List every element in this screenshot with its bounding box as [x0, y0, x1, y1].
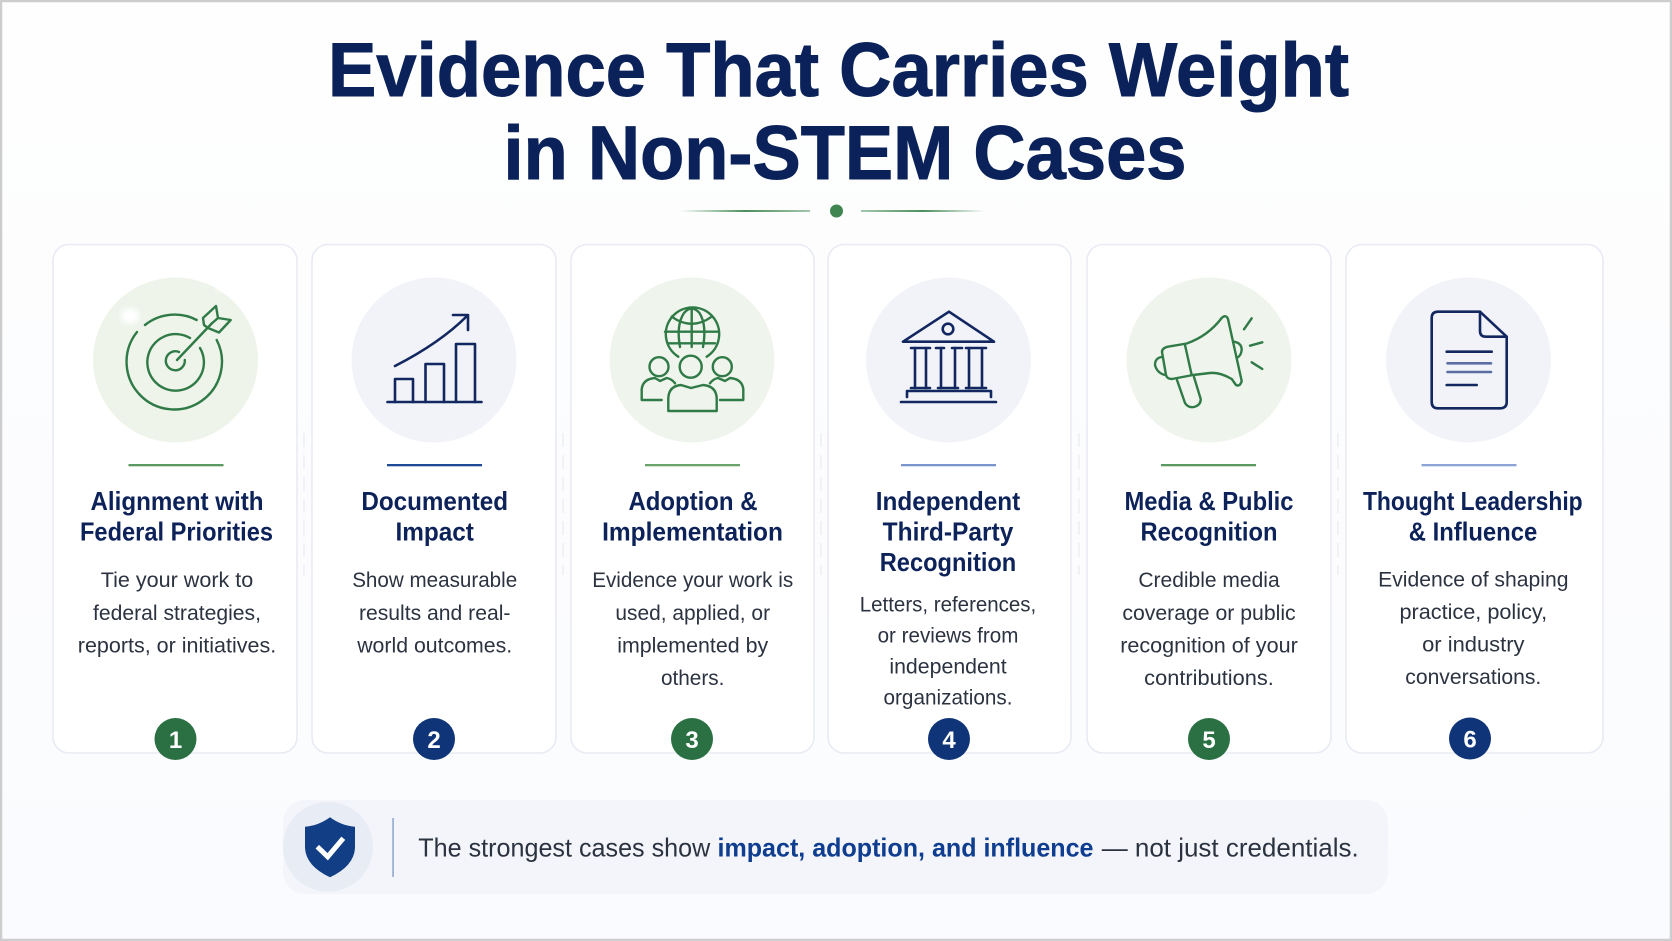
number badge 1	[154, 718, 196, 760]
number badge 6	[1449, 718, 1491, 760]
description	[78, 568, 276, 658]
accent line	[901, 464, 996, 466]
description	[592, 568, 793, 690]
takeaway text	[418, 833, 1359, 863]
heading	[361, 486, 508, 546]
description	[1378, 568, 1569, 689]
panel: alignment with federal priorities	[53, 244, 297, 760]
panel: independent third-party recognition	[828, 244, 1071, 760]
callout: key takeaway bar	[283, 800, 1388, 894]
takeaway text: The strongest cases show	[418, 833, 711, 863]
heading: Adoption &	[628, 486, 758, 516]
icon: megaphone	[1126, 278, 1292, 442]
title divider	[680, 204, 985, 218]
number badge 5	[1188, 718, 1230, 760]
number badge 1: 1	[169, 727, 182, 754]
accent line	[645, 464, 740, 466]
heading: & Influence	[1409, 516, 1537, 546]
description: Evidence your work is	[592, 568, 793, 592]
heading: Media & Public	[1124, 486, 1294, 516]
accent line	[387, 464, 482, 466]
description: implemented by	[617, 634, 768, 658]
description: Show measurable	[352, 568, 517, 592]
description	[1120, 568, 1298, 690]
number badge 4	[928, 718, 970, 760]
title	[328, 28, 1349, 196]
title: Evidence That Carries Weight	[328, 28, 1349, 113]
description: practice, policy,	[1399, 600, 1547, 624]
icon: shield with check	[283, 802, 373, 892]
description: world outcomes.	[356, 634, 512, 658]
number badge 5: 5	[1202, 727, 1216, 754]
number badge 2	[413, 718, 455, 760]
description: reports, or initiatives.	[78, 634, 276, 658]
heading: Implementation	[602, 516, 783, 546]
description: recognition of your	[1120, 634, 1298, 658]
description: independent	[889, 655, 1007, 679]
accent line	[1161, 464, 1256, 466]
number badge 3: 3	[685, 727, 699, 754]
panel: adoption and implementation	[571, 244, 814, 760]
heading: Documented	[361, 486, 508, 516]
heading: Recognition	[1140, 516, 1278, 546]
heading	[1363, 486, 1583, 546]
description: coverage or public	[1122, 601, 1296, 625]
icon: globe over people	[610, 278, 774, 442]
heading: Thought Leadership	[1363, 486, 1583, 516]
description: others.	[661, 666, 724, 690]
description: or industry	[1422, 632, 1525, 656]
number badge 3	[671, 718, 713, 760]
heading: Third-Party	[883, 516, 1014, 546]
heading	[876, 486, 1021, 577]
description: or reviews from	[878, 624, 1018, 648]
panel: thought leadership and influence	[1346, 244, 1603, 760]
icon: document	[1386, 278, 1551, 442]
heading	[80, 486, 273, 546]
heading: Impact	[396, 516, 474, 546]
description: Evidence of shaping	[1378, 568, 1569, 592]
description: organizations.	[884, 685, 1012, 709]
description: contributions.	[1144, 666, 1274, 690]
accent line	[1422, 464, 1516, 466]
number badge 4: 4	[942, 727, 956, 754]
panel: documented impact	[312, 244, 556, 760]
number badge 2: 2	[427, 727, 441, 754]
accent line	[128, 464, 224, 466]
description: Tie your work to	[101, 568, 253, 592]
description: Credible media	[1138, 568, 1280, 592]
heading: Alignment with	[90, 486, 264, 516]
heading: Independent	[876, 486, 1021, 516]
panel: media and public recognition	[1087, 244, 1331, 760]
takeaway text: — not just credentials.	[1102, 833, 1359, 863]
heading: Federal Priorities	[80, 516, 273, 546]
description: federal strategies,	[93, 601, 261, 625]
heading	[1124, 486, 1294, 546]
description: results and real-	[359, 601, 510, 625]
description	[352, 568, 517, 658]
icon: institution building	[866, 278, 1031, 442]
description: used, applied, or	[615, 601, 770, 625]
title: in Non-STEM Cases	[504, 111, 1186, 196]
number badge 6: 6	[1463, 726, 1477, 754]
heading	[602, 486, 783, 546]
heading: Recognition	[880, 547, 1016, 577]
description: Letters, references,	[860, 593, 1036, 617]
description	[860, 593, 1036, 709]
icon: rising bar chart	[352, 278, 516, 442]
takeaway text: impact, adoption, and influence	[718, 833, 1094, 863]
description: conversations.	[1405, 665, 1541, 689]
icon: target with arrow	[93, 278, 258, 442]
